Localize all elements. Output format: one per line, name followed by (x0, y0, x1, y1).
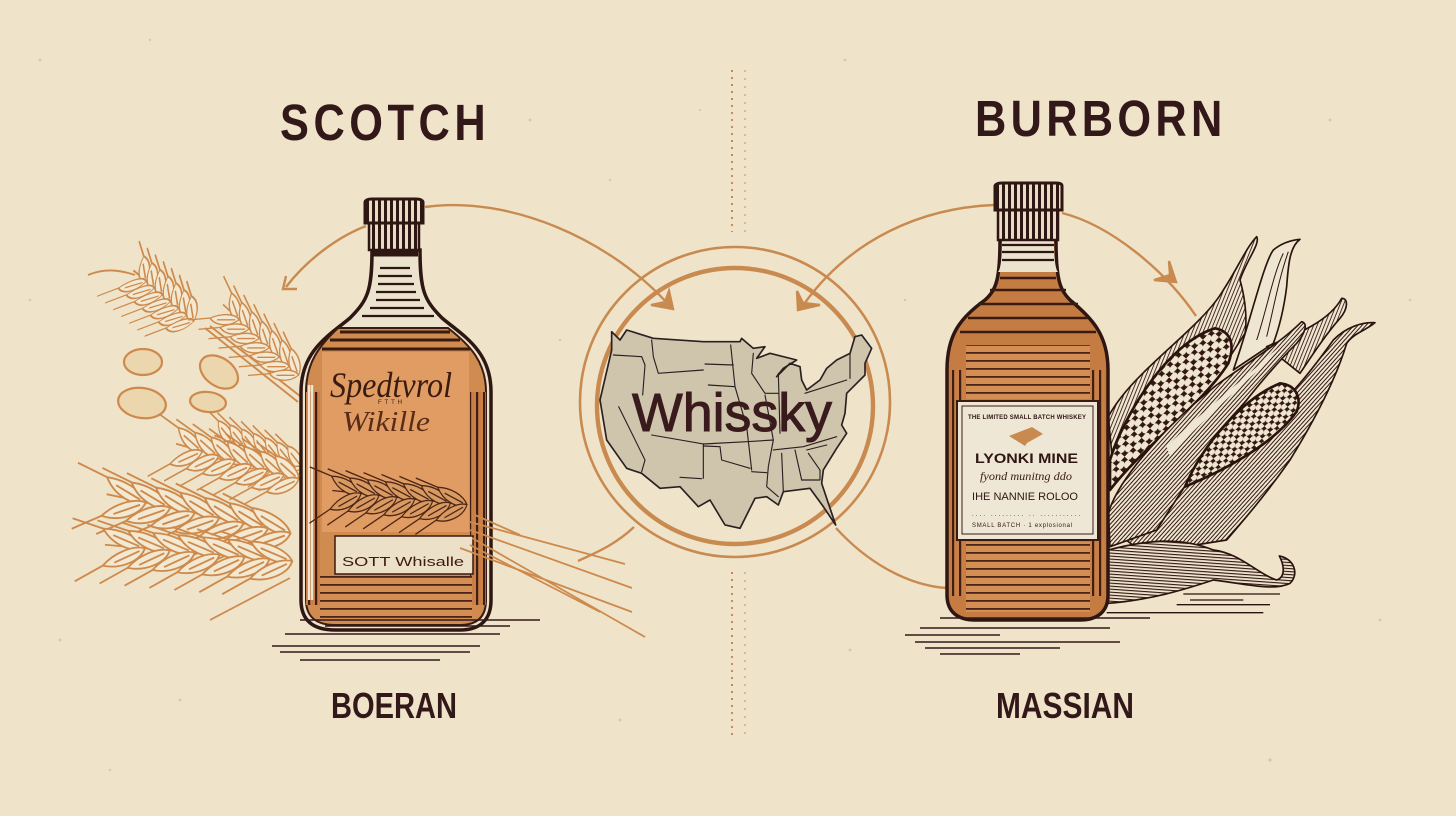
amber label (322, 352, 469, 532)
scotch caption: BOERAN (331, 685, 457, 726)
wheat ear: middle upper (143, 403, 311, 518)
map of the United States (600, 330, 872, 528)
arrow: bourbon to corn (1062, 213, 1196, 316)
corn ear two (1185, 383, 1299, 487)
lower arc left (578, 527, 634, 561)
label bottom print: SMALL BATCH · 1 explosional (972, 523, 1072, 529)
body hatching bottom (966, 542, 1090, 612)
side highlight (309, 385, 312, 600)
neck hatching (362, 268, 434, 316)
wheat ear: top left (88, 231, 300, 402)
grain seeds (116, 348, 244, 421)
bottle base (320, 576, 472, 620)
neck highlights (1002, 245, 1054, 260)
bourbon caption: MASSIAN (996, 685, 1134, 726)
outer right husk (1113, 323, 1375, 553)
husk hatching middle (1257, 252, 1288, 340)
whisky label: Whissky (632, 383, 832, 443)
bottle collar (369, 222, 419, 250)
bottle liquid (306, 328, 486, 625)
label inner frame (962, 406, 1093, 534)
front husk highlight (1167, 330, 1297, 457)
ear over bottle (304, 457, 473, 540)
wheat ear: lower (67, 507, 299, 601)
lower arc right (836, 528, 946, 588)
wheat illustration (64, 231, 322, 601)
ground lines near corn (1107, 594, 1280, 613)
label line text: IHE NANNIE ROLOO (972, 491, 1078, 503)
arrowhead: grain (283, 276, 297, 289)
bottle shoulder lines (322, 332, 470, 349)
bottle cap (365, 199, 423, 223)
bottle glass and liquid (947, 240, 1108, 620)
front husk (1108, 322, 1305, 547)
arrow: bourbon to whisky (804, 205, 994, 304)
arrowhead: whisky left (651, 291, 673, 309)
lower label text: SOTT Whisalle (342, 554, 464, 569)
back husk left (1108, 237, 1257, 470)
bourbon title: BURBORN (975, 91, 1222, 148)
wheat ear: top right (185, 268, 322, 402)
bottle glass (301, 250, 491, 630)
wheat ear: middle upper small (185, 398, 316, 503)
bottle collar (998, 210, 1058, 240)
bourbon bottle (947, 183, 1108, 620)
upper glass (998, 240, 1058, 272)
circle badge (580, 247, 890, 557)
connecting arcs and arrows (283, 205, 1196, 588)
body hatching top (966, 345, 1090, 399)
label script text: fyond munitng ddo (980, 469, 1072, 483)
label icon (1009, 427, 1043, 446)
label script: Spedtvrol (330, 365, 452, 405)
centre dotted divider (732, 70, 745, 738)
corn ear one (1110, 328, 1232, 490)
scotch ground shadow (272, 620, 540, 660)
scotch title: SCOTCH (280, 95, 486, 152)
bourbon ground shadow (905, 618, 1150, 654)
arrowhead: whisky right (797, 291, 820, 310)
lower leaves (1108, 541, 1295, 603)
label small text: FTTH (378, 400, 402, 406)
label main text: LYONKI MINE (975, 450, 1078, 466)
shoulder lines (960, 278, 1096, 332)
label script second line: Wikille (342, 407, 430, 438)
arrow: scotch to grain (286, 226, 366, 287)
arrow: scotch to whisky (425, 205, 668, 304)
wheat ear: middle (64, 451, 302, 575)
scotch bottle (301, 199, 491, 630)
collar ring (372, 252, 418, 256)
back husk right (1267, 298, 1346, 373)
stems in front (210, 515, 645, 637)
corn illustration (1107, 237, 1375, 613)
side hatching (306, 392, 486, 605)
lower label (335, 536, 473, 574)
bottle cap (995, 183, 1062, 210)
bottle side stripes (952, 370, 1104, 596)
arrowhead: corn (1154, 261, 1176, 282)
cream label (957, 401, 1098, 540)
label top text: THE LIMITED SMALL BATCH WHISKEY (968, 415, 1086, 421)
label small print: .... ......... .. ........... (972, 512, 1080, 518)
wheat over bottle and stems (210, 457, 645, 637)
back husk middle (1233, 239, 1300, 370)
